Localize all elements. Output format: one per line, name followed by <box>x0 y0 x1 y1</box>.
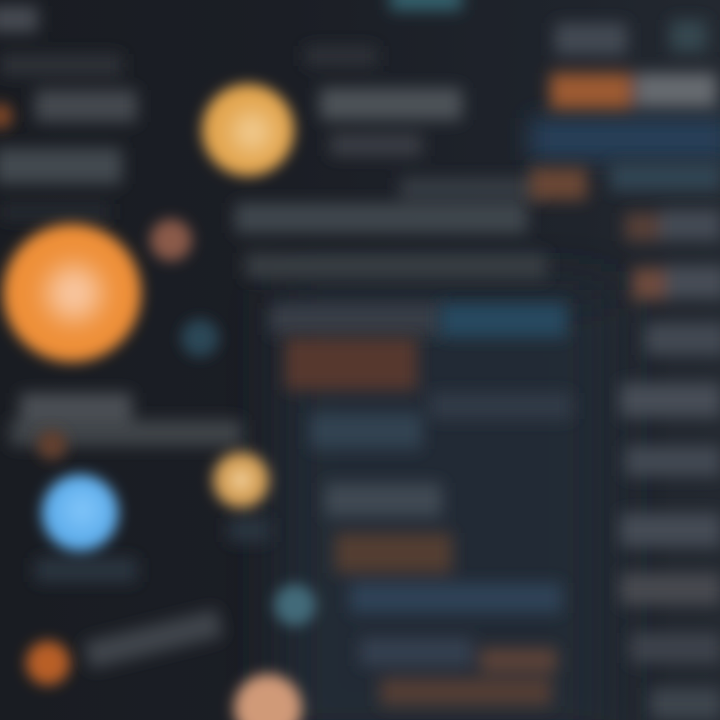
icon: yellow orb <box>202 84 294 176</box>
icon: orange dot bottom left <box>26 641 70 685</box>
icon: peach orb bottom <box>234 674 302 720</box>
icon: large orange orb <box>3 224 141 362</box>
icon: blue orb <box>42 475 118 551</box>
panel: top center text bars <box>235 46 547 335</box>
panel: right column list <box>620 210 720 720</box>
icon: teal dot <box>274 584 316 626</box>
panel: center orange and blue rows <box>285 338 572 706</box>
panel: top right band <box>530 118 720 160</box>
icon: edge orange dot <box>0 103 13 129</box>
icon: small peach orb <box>150 219 192 261</box>
panel: bottom left text bars <box>10 393 270 669</box>
icon: faded orange dot <box>37 430 67 460</box>
icon: dark blue dot <box>181 319 219 357</box>
panel: top right labels <box>390 0 720 337</box>
icon: small yellow orb <box>213 452 269 508</box>
panel: central column <box>280 290 610 720</box>
panel: top left text bars <box>0 6 137 220</box>
